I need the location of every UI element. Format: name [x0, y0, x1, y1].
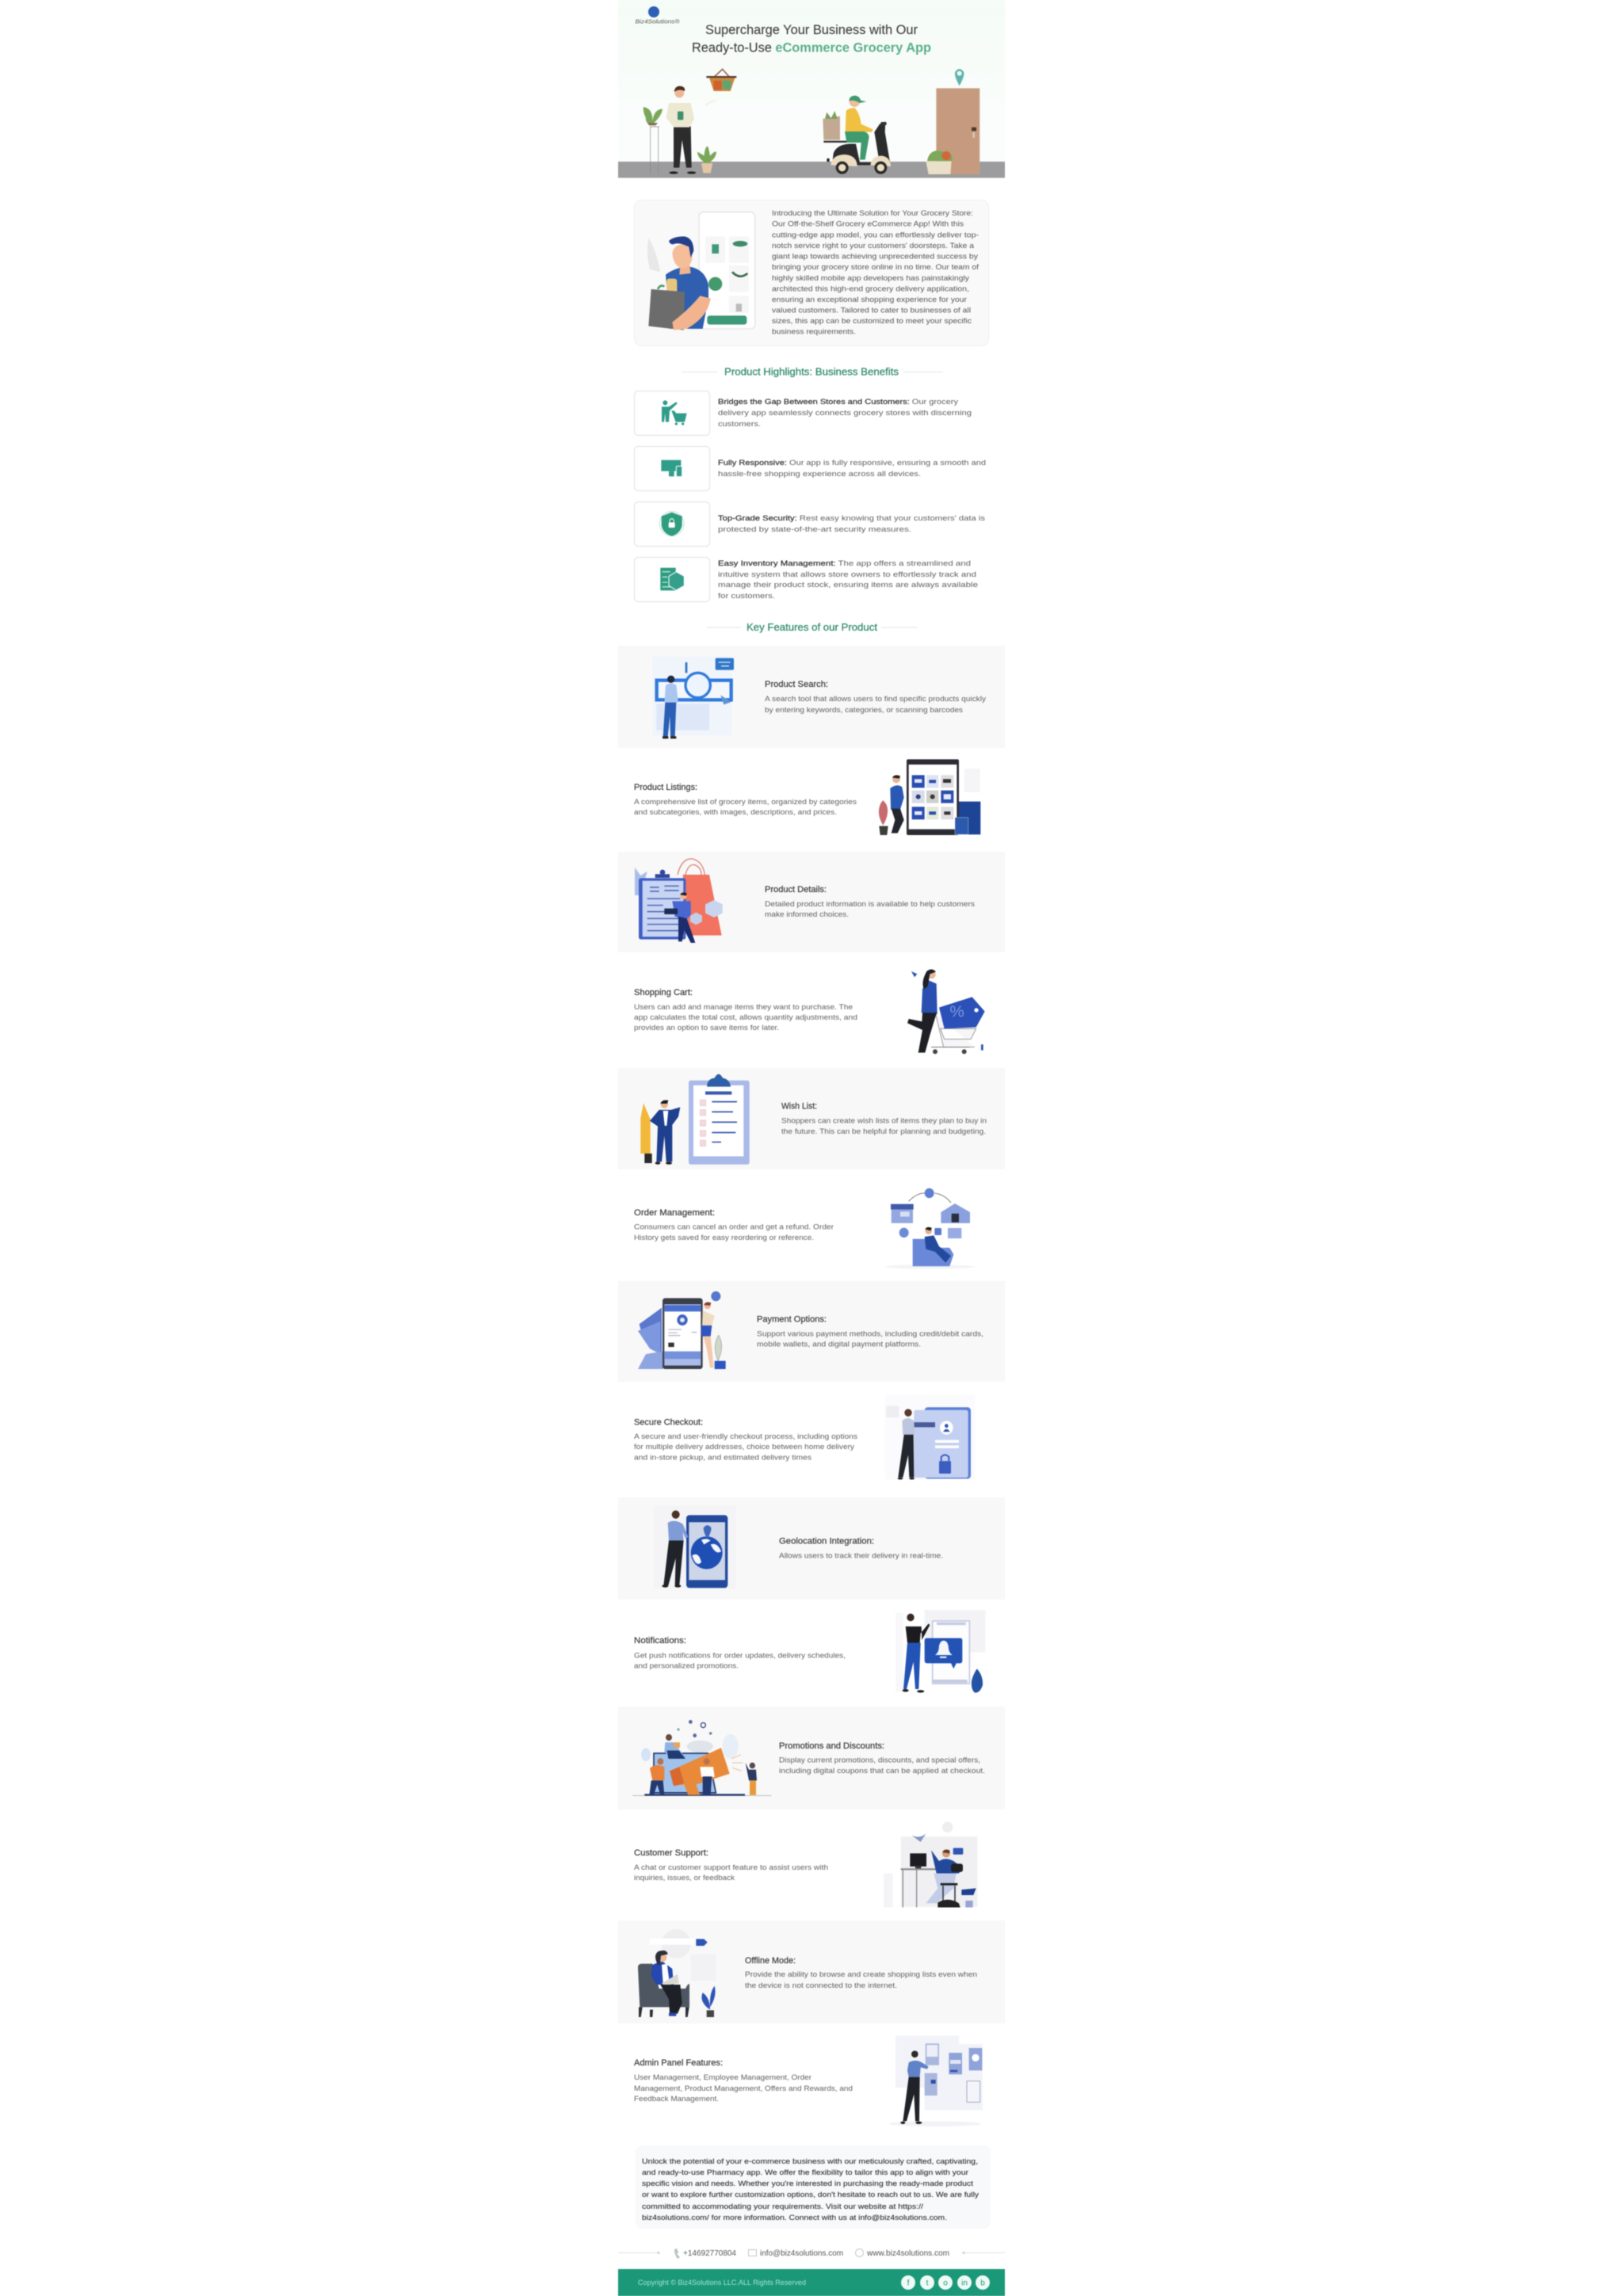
description: Get push notifications for order updates, delivery schedules,	[634, 1651, 846, 1661]
description: History gets saved for easy reordering or reference.	[634, 1234, 814, 1242]
description: Allows users to track their delivery in real-time.	[779, 1551, 943, 1561]
intro text: giant leap towards achieving unprecedented success by	[772, 252, 978, 261]
title: Shopping Cart:	[634, 988, 693, 997]
feature: admin panel features	[634, 2035, 983, 2126]
title: Admin Panel Features:	[634, 2058, 723, 2068]
description: and personalized promotions.	[634, 1662, 739, 1670]
benefit: top-grade security: protected by state-of-the-art security measures.	[718, 525, 911, 534]
phone number: +14692770804	[683, 2248, 736, 2258]
copyright: Copyright © Biz4Solutions LLC.ALL Rights Reserved	[638, 2279, 806, 2287]
social icons: b	[980, 2279, 985, 2288]
panel: closing call to action: or want to explore further customization options, don't hesitate to reach out to us. We are fully	[642, 2191, 979, 2199]
panel: closing call to action: committed to accommodating your requirements. Visit our website at https://	[642, 2203, 923, 2211]
header background	[618, 0, 1005, 178]
illustration: clipboard and shopping bag	[635, 859, 723, 943]
description	[634, 1003, 857, 1032]
social icons	[901, 2275, 990, 2290]
social icons: f	[907, 2279, 910, 2288]
description: inquiries, issues, or feedback	[634, 1874, 735, 1882]
intro text: Our Off-the-Shelf Grocery eCommerce App! With this	[772, 220, 964, 228]
illustration: delivery man with phone	[647, 212, 755, 330]
intro card	[634, 200, 989, 345]
illustration: phone payment and cards	[638, 1291, 726, 1369]
description: make informed choices.	[765, 910, 849, 919]
title: Product Search:	[765, 680, 828, 689]
feature: wish list	[618, 1068, 1005, 1169]
social icons: in	[961, 2279, 968, 2288]
intro text: highly skilled mobile app developers has painstakingly	[772, 274, 969, 283]
illustration: magnifier and search bar	[652, 656, 734, 738]
intro text: sizes, this app can be customized to meet your specific	[772, 317, 972, 326]
illustration: woman on armchair with laptop	[638, 1929, 716, 2017]
social icons: o	[943, 2279, 948, 2288]
benefit: fully responsive: hassle-free shopping experience across all devices.	[718, 470, 921, 479]
illustration: delivery scooter rider	[823, 96, 891, 174]
title: Promotions and Discounts:	[779, 1741, 884, 1751]
benefit: fully responsive	[634, 447, 986, 491]
title: Wish List:	[781, 1101, 817, 1111]
illustration: admin dashboard panels	[889, 2035, 983, 2126]
icon: phone	[674, 2248, 680, 2259]
benefit: top-grade security: Top-Grade Security: Rest easy knowing that your customers' data is	[718, 514, 985, 523]
description: A chat or customer support feature to assist users with	[634, 1863, 828, 1872]
feature: payment options	[618, 1281, 1005, 1382]
heading: product highlights: Product Highlights: Business Benefits	[724, 366, 899, 377]
description: by entering keywords, categories, or scanning barcodes	[765, 706, 963, 715]
description	[781, 1117, 987, 1136]
description: Management, Product Management, Offers and Rewards, and	[634, 2084, 853, 2093]
description: Detailed product information is available to help customers	[765, 900, 975, 909]
description: Support various payment methods, including credit/debit cards,	[757, 1329, 983, 1339]
description	[757, 1329, 983, 1348]
description: the device is not connected to the internet.	[745, 1981, 897, 1990]
feature: order management	[634, 1188, 975, 1269]
description	[765, 695, 986, 715]
illustration: megaphone team	[632, 1720, 771, 1796]
benefit: bridges the gap: customers.	[718, 420, 761, 429]
description: provides an option to save items for later.	[634, 1024, 779, 1032]
intro text: architected this high-end grocery delivery application,	[772, 285, 969, 293]
description: Consumers can cancel an order and get a refund. Order	[634, 1223, 834, 1231]
intro text: ensuring an exceptional shopping experience for your	[772, 296, 967, 304]
feature: secure checkout	[634, 1395, 975, 1480]
description: for multiple delivery addresses, choice between home delivery	[634, 1443, 854, 1451]
benefit: easy inventory management: manage their product stock, ensuring items are always available	[718, 581, 978, 589]
title: Geolocation Integration:	[779, 1537, 874, 1547]
panel: closing call to action	[636, 2145, 991, 2229]
title: Payment Options:	[757, 1315, 827, 1325]
description: Display current promotions, discounts, and special offers,	[779, 1756, 980, 1765]
intro text	[772, 209, 979, 336]
feature: product listings	[634, 759, 980, 835]
description: Shoppers can create wish lists of items they plan to buy in	[781, 1117, 987, 1125]
description	[745, 1970, 977, 1990]
benefit: easy inventory management: for customers.	[718, 592, 775, 601]
illustration: door with pin and groceries	[926, 69, 980, 174]
icon: email	[748, 2250, 756, 2256]
panel: introduction	[634, 200, 989, 345]
title: Product Details:	[765, 885, 827, 894]
illustration: secure phone checkout	[885, 1395, 975, 1480]
benefit: bridges the gap: Bridges the Gap Between Stores and Customers: Our grocery	[718, 398, 958, 406]
description: app calculates the total cost, allows quantity adjustments, and	[634, 1013, 857, 1022]
benefit: easy inventory management: intuitive system that allows store owners to effortlessly track and	[718, 570, 976, 579]
feature: product search	[618, 646, 1005, 748]
illustration: woman with cart and discount tag	[907, 969, 985, 1054]
title: Secure Checkout:	[634, 1418, 703, 1428]
feature: promotions and discounts	[618, 1707, 1005, 1810]
illustration: customer with plants and basket	[643, 69, 736, 174]
description: A secure and user-friendly checkout process, including options	[634, 1432, 857, 1441]
description	[634, 1651, 846, 1670]
description: and in-store pickup, and estimated delivery times	[634, 1453, 812, 1463]
intro text: notch service right to your customers' doorsteps. Take a	[772, 242, 975, 250]
description	[634, 1223, 834, 1242]
panel: closing call to action: specific vision and needs. Whether you're interested in purchasing the ready-made product	[642, 2180, 973, 2188]
website: www.biz4solutions.com	[866, 2248, 949, 2258]
ground strip	[618, 162, 1005, 177]
illustration: man with pencil and checklist	[640, 1074, 750, 1165]
intro text: cutting-edge app model, you can effortlessly deliver top-	[772, 231, 979, 239]
title: Product Listings:	[634, 783, 697, 792]
description: mobile wallets, and digital payment platforms.	[757, 1341, 921, 1348]
illustration: order flow between store and customer	[885, 1188, 975, 1269]
illustration: tablet catalogue	[879, 759, 980, 835]
heading: key features: Key Features of our Product	[747, 621, 877, 633]
panel: closing call to action: Unlock the potential of your e-commerce business with our meticulously crafted, captivating,	[642, 2157, 978, 2166]
benefit: bridges the gap	[634, 391, 972, 436]
description: User Management, Employee Management, Order	[634, 2073, 812, 2082]
description: A search tool that allows users to find specific products quickly	[765, 695, 986, 704]
illustration: person and notification bell	[896, 1610, 985, 1693]
title: Customer Support:	[634, 1848, 708, 1858]
title: Ready-to-Use eCommerce Grocery App	[692, 41, 931, 55]
intro text: bringing your grocery store online in no time. Our team of	[772, 263, 979, 272]
benefit: fully responsive: Fully Responsive: Our app is fully responsive, ensuring a smooth and	[718, 459, 986, 467]
description: and subcategories, with images, descriptions, and prices.	[634, 808, 837, 817]
illustration: phone with globe	[654, 1506, 735, 1589]
benefit: bridges the gap: delivery app seamlessly connects grocery stores with discerning	[718, 409, 972, 418]
benefit: easy inventory management	[634, 558, 978, 602]
intro text: Introducing the Ultimate Solution for Your Grocery Store:	[772, 209, 973, 218]
benefit: top-grade security	[634, 502, 985, 547]
logo	[636, 6, 680, 25]
logo: Biz4Solutions®	[636, 17, 680, 25]
benefit: easy inventory management: Easy Inventory Management: The app offers a streamlined and	[718, 559, 971, 568]
section: business benefits	[634, 391, 986, 602]
description: the future. This can be helpful for planning and budgeting.	[781, 1127, 986, 1136]
description	[765, 900, 975, 919]
description	[634, 1863, 828, 1882]
footer bar	[618, 2269, 1005, 2296]
panel: closing call to action: and ready-to-use Pharmacy app. We offer the flexibility to tailor this app to align with your	[642, 2168, 968, 2177]
description	[779, 1756, 985, 1775]
title: Offline Mode:	[745, 1956, 796, 1966]
title: Supercharge Your Business with Our	[705, 23, 918, 37]
icon: globe	[856, 2248, 864, 2256]
social icons: t	[926, 2279, 929, 2288]
panel: header	[618, 0, 1005, 178]
title	[692, 23, 931, 55]
description: Feedback Management.	[634, 2095, 719, 2103]
description: Users can add and manage items they want to purchase. The	[634, 1003, 853, 1012]
illustration: woman with cart and discount tag: %	[949, 1002, 964, 1020]
intro text: valued customers. Tailored to cater to businesses of all	[772, 306, 971, 315]
description: including digital coupons that can be applied at checkout.	[779, 1767, 985, 1775]
feature: shopping cart	[634, 969, 985, 1054]
feature: notifications	[634, 1610, 985, 1693]
intro text: business requirements.	[772, 328, 856, 336]
illustration: support agent at desk	[884, 1821, 977, 1908]
description	[634, 2073, 853, 2103]
description	[634, 1432, 857, 1463]
email address: info@biz4solutions.com	[760, 2248, 843, 2258]
feature: customer support	[634, 1821, 977, 1908]
feature: offline mode	[618, 1920, 1005, 2023]
feature: geolocation integration	[618, 1497, 1005, 1600]
description: A comprehensive list of grocery items, organized by categories	[634, 798, 857, 807]
panel: closing call to action: biz4solutions.com/ for more information. Connect with us at info@biz4solutions.com.	[642, 2214, 947, 2222]
description	[634, 798, 857, 817]
title: Order Management:	[634, 1208, 715, 1218]
title: Notifications:	[634, 1636, 686, 1646]
contact row	[618, 2248, 1005, 2259]
feature: product details	[618, 852, 1005, 952]
description: Provide the ability to browse and create shopping lists even when	[745, 1970, 977, 1979]
